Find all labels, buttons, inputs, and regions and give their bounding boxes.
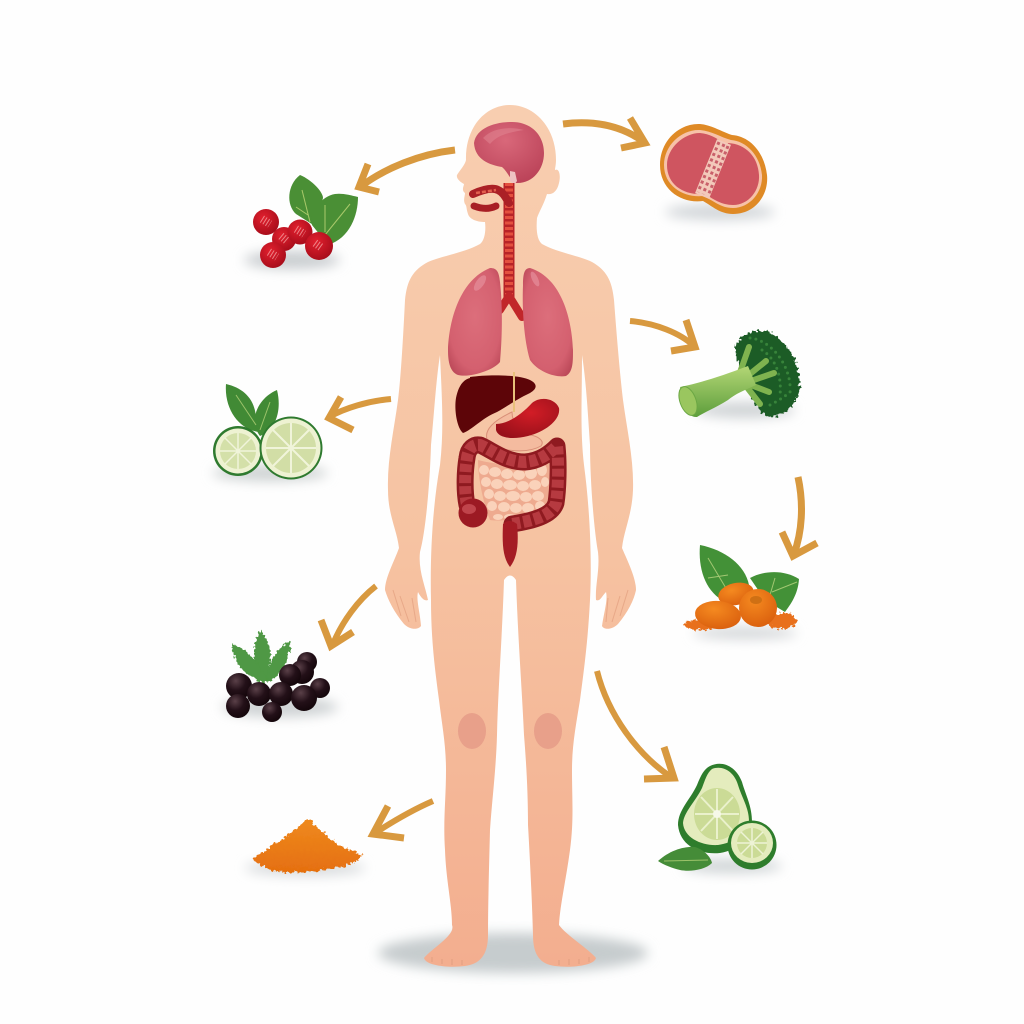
human body figure: [385, 105, 636, 967]
stalk: [738, 347, 774, 404]
knees: [458, 713, 562, 749]
arrow: to black berries: [321, 586, 376, 646]
food: grapefruit: [660, 124, 775, 220]
cut pear-shaped citrus: [678, 764, 752, 853]
organ: lungs: [448, 268, 573, 376]
food: black berries with leaves: [222, 630, 338, 722]
arrow: to spice powder: [373, 801, 433, 838]
roots: [694, 579, 777, 631]
arrow: to green citrus: [597, 671, 674, 779]
food: orange spice powder pile: [245, 819, 365, 876]
food: green citrus with leaf: [658, 764, 782, 873]
leaves: [226, 384, 279, 436]
arrow: to broccoli: [630, 320, 695, 351]
organ: trachea and mouth: [473, 183, 522, 317]
small lime: [213, 426, 263, 476]
berries: [253, 209, 333, 268]
food: red berries with leaves: [244, 175, 358, 269]
food: broccoli: [675, 330, 800, 418]
arrow: head to berries: [359, 150, 455, 192]
organ: large intestine: [458, 445, 558, 567]
ground shadow: [378, 933, 648, 973]
arrow: to turmeric: [782, 477, 817, 556]
leaves: [289, 175, 358, 245]
arrow: to limes: [329, 397, 391, 430]
powder: [684, 613, 797, 630]
leaf: [658, 847, 712, 871]
organ: stomach: [496, 399, 559, 438]
lime slice: [728, 820, 776, 870]
organ: small intestine: [478, 458, 550, 521]
big lime: [260, 416, 322, 480]
berries: [226, 652, 330, 722]
leaves: [700, 545, 799, 612]
organ: pancreas: [487, 412, 542, 451]
crown: [735, 330, 800, 417]
organ: brain: [474, 122, 544, 185]
arrow: head to grapefruit: [563, 118, 645, 148]
fern leaves: [232, 630, 290, 682]
body silhouette: [385, 105, 636, 967]
organ: bile duct: [513, 372, 515, 412]
food: turmeric roots with leaves: [684, 545, 799, 639]
food: limes with leaves: [212, 384, 328, 481]
organ: liver: [455, 375, 536, 433]
toes: [432, 957, 589, 965]
finger lines: [393, 590, 628, 622]
